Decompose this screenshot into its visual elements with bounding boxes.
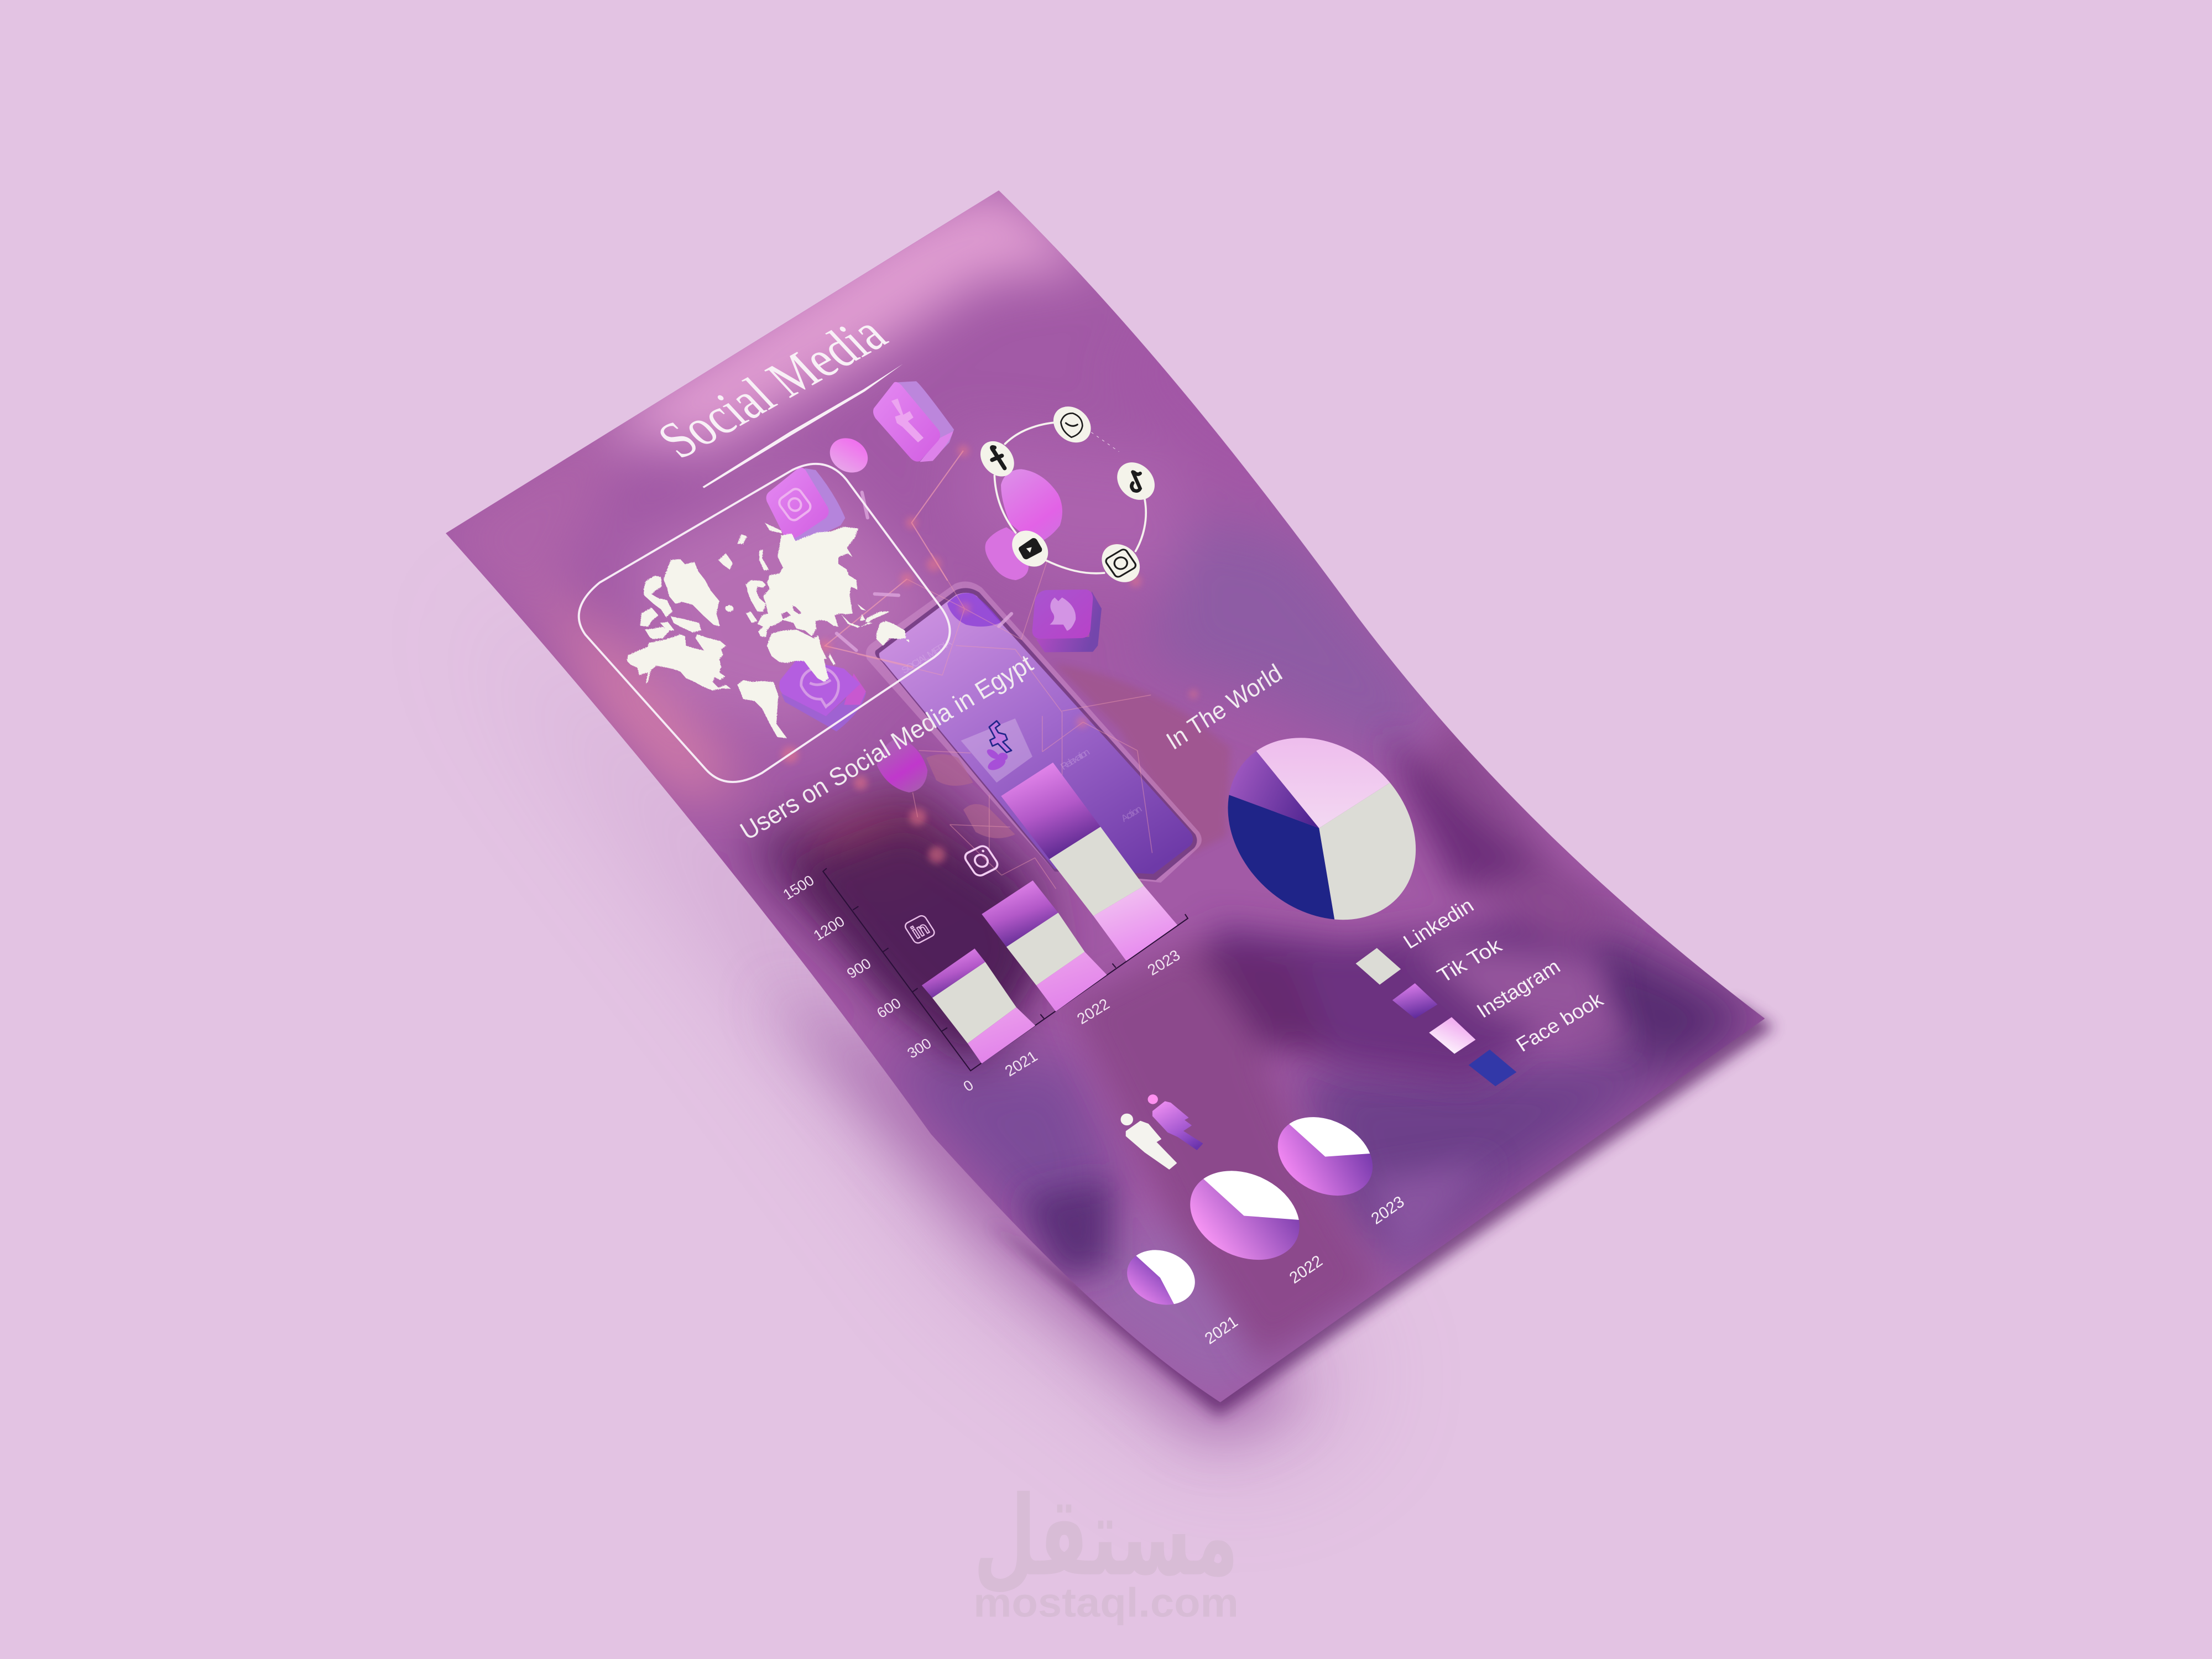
icon: male and female figures [1121,1094,1202,1169]
x-axis labels: 2023 [1144,946,1183,979]
y-axis labels: 1200 [811,913,848,944]
legend: Face book [1469,988,1608,1086]
icon: linkedin outline: in [908,918,932,942]
icon: 3D instagram cube [766,468,845,541]
pink blob beside heading [823,431,874,479]
icon: facebook outline on phone [989,721,1011,753]
pie chart: 2023 [1219,1044,1467,1206]
map: British Isles [746,612,758,623]
node: youtube [1005,523,1055,574]
social ring [973,399,1162,590]
world map [627,523,909,738]
heading: In The World: In The World [1162,659,1287,755]
y-axis labels [780,872,977,1095]
node: facebook [973,435,1021,483]
icon: woman [1148,1094,1202,1150]
screen notch colour [947,593,1001,627]
blob behind chart title [877,738,927,792]
y-axis labels: 300 [904,1035,935,1062]
y-axis labels: 0 [961,1077,977,1095]
y-axis labels: 900 [844,955,874,982]
bar 2021 [922,948,1035,1063]
paper photo background [446,190,1765,1402]
decorative pills [837,492,1011,650]
legend: Tik Tok: Tik Tok [1433,934,1506,987]
y-axis labels: 1500 [780,872,817,903]
watermark: مستقل [973,1472,1239,1600]
map: Australia [877,621,909,646]
screen faint labels: Action [1119,803,1144,824]
icon: 3D twitter cube [1032,589,1102,652]
legend [1356,894,1608,1086]
pie chart: world [1129,620,1495,1011]
map: Eurasia [758,526,858,637]
screen faint labels: SOCIAL MEDIA [899,637,953,676]
map: Iceland [726,605,733,612]
map: South-East Asia [841,604,890,628]
blob behind ring [1001,469,1062,544]
heading: Social Media: Social Media [645,304,899,469]
pie year labels: 2023 [1368,1193,1407,1228]
hand: thumb and palm [1054,664,1230,854]
heading underline [702,364,903,488]
icon: linkedin outline [904,914,936,945]
screen faint labels: Relaxation [1058,746,1092,772]
ring strokes [994,422,1146,573]
map: Africa [767,629,829,682]
bar chart [780,763,1188,1095]
legend: Linkedin: Linkedin [1399,894,1478,953]
phone body [866,582,1202,883]
legend: Tik Tok [1392,934,1506,1019]
paper shadow [466,592,1775,1453]
screen card [961,718,1032,782]
legend: Linkedin [1356,894,1478,985]
map: Arctic islands [640,523,782,639]
phone [866,582,1202,883]
pie chart: 2022 [1125,1086,1411,1270]
pie year labels: 2021 [1202,1313,1241,1348]
x-axis labels: 2022 [1074,995,1113,1027]
lower blob behind ring [985,527,1029,580]
pie year labels [1202,1193,1407,1348]
pie year labels: 2022 [1286,1252,1326,1287]
bar 2023 [1001,763,1177,961]
x-axis labels [1001,946,1183,1079]
icon: instagram outline [963,844,1000,878]
map: South America [737,680,787,738]
network lines [781,445,1198,889]
screen leaves [985,748,1008,773]
x-axis labels: 2021 [1001,1047,1041,1079]
map: Scandinavia [746,580,766,612]
map: Madagascar [829,654,836,665]
chart axes [823,868,1188,1071]
node: tiktok [1109,455,1162,508]
icon: 3D facebook cube [873,381,954,462]
watermark: mostaql.com [973,1579,1239,1625]
bar 2022 [982,880,1107,1011]
node: whatsapp [1046,399,1098,450]
map: North America [627,634,731,691]
icon: 3D whatsapp cube [779,661,866,732]
pie chart: 2021 [1088,1212,1241,1357]
phone dark bezel [875,588,1197,880]
poster sheet [446,190,1765,1402]
watermark [973,1472,1239,1625]
screen faint labels [899,637,1144,824]
legend: Instagram: Instagram [1473,955,1564,1022]
phone screen [879,593,1193,874]
map: Greenland [664,559,720,627]
map frame [579,464,950,782]
legend: Face book: Face book [1512,988,1608,1056]
finger shapes [926,754,1015,838]
heading: Users on Social Media in Egypt: Users on Social Media in Egypt [735,649,1038,846]
legend: Instagram [1429,955,1564,1054]
icon: man [1121,1114,1176,1169]
node: instagram [1094,536,1147,590]
y-axis labels: 600 [874,995,904,1021]
